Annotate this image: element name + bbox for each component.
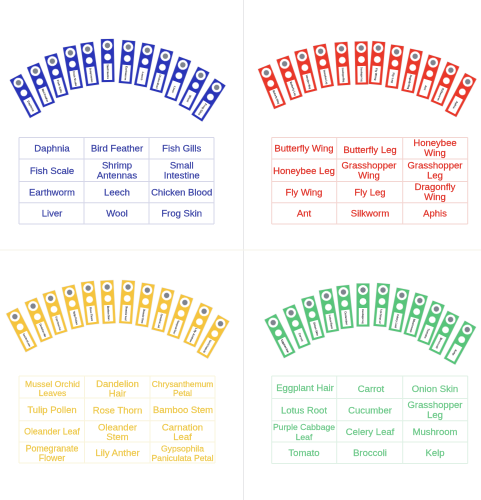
- slide: Fly Wing: [369, 41, 385, 85]
- table: blue slide names: Frog Skin: [161, 209, 202, 220]
- table: red slide names: Dragonfly: [415, 182, 456, 193]
- slide: Bird Feather: [27, 63, 55, 107]
- table: yellow slide names: Paniculata Petal: [151, 453, 214, 463]
- slide: Dandelion Hair: [25, 298, 53, 342]
- slide: Aphis: Aphis: [452, 100, 459, 110]
- slide: Butterfly Leg: Butterfly Leg: [289, 81, 297, 96]
- table: blue slide names: Chicken Blood: [151, 188, 212, 198]
- slide: Purple Cabbage Leaf: [373, 283, 390, 327]
- table: red slide names: Wing: [424, 148, 446, 159]
- table: blue slide names: Earthworm: [29, 188, 75, 198]
- table: red slide names: Fly Leg: [354, 188, 386, 198]
- table: blue slide names: Daphnia: [34, 144, 70, 154]
- table: yellow slide names: Lily Anther: [95, 448, 140, 459]
- slide: Oleander Leaf: [119, 280, 135, 324]
- slide: Grasshopper Leg: Grasshopper Leg: [360, 67, 364, 82]
- slide: Pomegranate Flower: [167, 294, 193, 339]
- table: red slide names: Butterfly Leg: [343, 145, 397, 156]
- slide: Wool: Wool: [185, 95, 192, 103]
- slide: Chicken Blood: [150, 48, 173, 93]
- table: yellow slide names: Petal: [173, 388, 192, 398]
- table: yellow slide names: Gypsophila: [161, 444, 204, 454]
- table: red slide names: Butterfly Wing: [274, 144, 334, 154]
- slide: Gypsophila Paniculata Petal: Gypsophila Paniculata Petal: [202, 339, 213, 354]
- table: yellow slide names: Leaf: [173, 432, 192, 443]
- table: green slide names: Cucumber: [348, 406, 392, 416]
- table: red slide names: Grasshopper: [342, 161, 396, 172]
- table: red slide names: Ant: [297, 209, 311, 220]
- table: green slide names: [272, 376, 468, 464]
- slide: Eggplant Hair: Eggplant Hair: [280, 339, 290, 354]
- slide: Dandelion Hair: Dandelion Hair: [38, 323, 48, 338]
- table: green slide names: Eggplant Hair: [276, 383, 334, 394]
- slide: Cucumber: [336, 285, 354, 329]
- slide: Grasshopper Leg: Grasshopper Leg: [361, 309, 365, 324]
- table: yellow slide names: Oleander Leaf: [24, 426, 80, 436]
- table: blue slide names: Liver: [42, 209, 62, 220]
- slide: Lily Anther: Lily Anther: [188, 327, 198, 344]
- table: red slide names: Leg: [427, 170, 443, 182]
- slide: Kelp: [444, 321, 476, 365]
- slide: Fly Leg: Fly Leg: [390, 72, 396, 83]
- slide: Fish Scale: Fish Scale: [72, 71, 78, 87]
- slide: Oleander Leaf: Oleander Leaf: [124, 306, 129, 321]
- table: yellow slide names: Leaves: [39, 388, 66, 398]
- table: red slide names: Honeybee: [413, 138, 457, 149]
- slide: Bird Feather: Bird Feather: [41, 88, 50, 103]
- slide: Daphnia: Daphnia: [26, 100, 35, 112]
- slide: Liver: Liver: [170, 85, 177, 94]
- slide: Honeybee Wing: Honeybee Wing: [305, 74, 312, 89]
- table: green slide names: Carrot: [358, 384, 385, 395]
- table: green slide names: Tomato: [288, 448, 320, 459]
- slide: Earthworm: Earthworm: [123, 66, 129, 81]
- slide: Grasshopper Leg: [357, 284, 369, 326]
- slide: Oleander Stem: Oleander Stem: [140, 309, 146, 324]
- slide: Kelp: Kelp: [451, 349, 458, 356]
- table: red slide names: Fly Wing: [286, 188, 322, 198]
- slide: Mussel Orchid Leaves: Mussel Orchid Leaves: [22, 333, 32, 347]
- slide: Shrimp Antennas: [80, 42, 99, 86]
- slide: Leech: [134, 43, 155, 87]
- slide: Chrysanthemum Petal: [43, 290, 67, 335]
- panel: yellow flower slides: [6, 280, 229, 359]
- table: blue slide names: Bird Feather: [91, 144, 143, 154]
- slide: Celery Leaf: [389, 288, 409, 332]
- slide: Carnation Leaf: [152, 288, 174, 332]
- slide: Fish Scale: [63, 45, 83, 90]
- slide: Tulip Pollen: Tulip Pollen: [72, 311, 79, 325]
- slide: Gypsophila Paniculata Petal: [197, 315, 229, 359]
- slide: Chrysanthemum Petal: Chrysanthemum Petal: [54, 316, 62, 331]
- slide: Celery Leaf: Celery Leaf: [394, 314, 400, 328]
- slide: Shrimp Antennas: Shrimp Antennas: [88, 68, 94, 83]
- table: red slide names: Honeybee Leg: [273, 166, 335, 177]
- table: blue slide names: Antennas: [97, 170, 137, 182]
- slide: Oleander Stem: [135, 283, 155, 327]
- table: red slide names: Grasshopper: [408, 161, 462, 172]
- table: green slide names: Broccoli: [353, 448, 387, 459]
- table: blue slide names: [19, 138, 214, 224]
- slide: Silkworm: [431, 62, 459, 106]
- slide: Pomegranate Flower: Pomegranate Flower: [172, 320, 181, 335]
- slide: Tomato: [417, 301, 445, 345]
- table: green slide names: Lotus Root: [281, 406, 327, 416]
- table: red slide names: Silkworm: [351, 209, 389, 220]
- slide: Purple Cabbage Leaf: Purple Cabbage Leaf: [378, 309, 383, 324]
- slide: Broccoli: [429, 311, 459, 355]
- table: green slide names: Leg: [427, 410, 443, 421]
- slide: Butterfly Leg: [276, 56, 303, 100]
- table: blue slide names: Fish Gills: [162, 144, 201, 154]
- table: red slide names: Aphis: [423, 209, 447, 220]
- table: yellow slide names: Hair: [109, 388, 126, 400]
- slide: Liver: [164, 57, 191, 101]
- table: yellow slide names: Rose Thorn: [93, 406, 142, 416]
- panel: red insect slides: [258, 41, 476, 117]
- slide: Frog Skin: [191, 78, 226, 122]
- slide: Broccoli: Broccoli: [435, 337, 444, 349]
- slide: Grasshopper Leg: [355, 41, 368, 85]
- slide: Ant: Ant: [423, 85, 428, 91]
- slide: Fish Gills: [44, 53, 69, 98]
- table: blue slide names: Small: [170, 161, 194, 172]
- slide: Daphnia: [10, 74, 41, 118]
- slide: Fly Leg: [385, 45, 404, 89]
- slide: Wool: [179, 67, 209, 111]
- table: yellow slide names: Flower: [39, 453, 65, 463]
- table: green slide names: Purple Cabbage: [273, 422, 335, 432]
- slide: Onion Skin: Onion Skin: [312, 322, 320, 336]
- table: green slide names: Celery Leaf: [346, 427, 395, 438]
- slide: Grasshopper Wing: [335, 42, 350, 86]
- slide: Lily Anther: [183, 303, 213, 347]
- slide: Earthworm: [119, 40, 135, 84]
- table: blue slide names: Shrimp: [102, 161, 132, 172]
- slide: Bamboo Stem: Bamboo Stem: [106, 306, 111, 321]
- table: blue slide names: Intestine: [164, 170, 200, 182]
- table: red slide names: Wing: [424, 192, 446, 203]
- slide: Lotus Root: [319, 288, 339, 333]
- slide: Frog Skin: Frog Skin: [197, 102, 208, 116]
- slide: Chicken Blood: Chicken Blood: [155, 74, 162, 89]
- table: green slide names: Onion Skin: [412, 384, 458, 395]
- table: green slide names: Leaf: [296, 432, 313, 442]
- table: yellow slide names: Tulip Pollen: [27, 405, 77, 416]
- table: yellow slide names: Carnation: [162, 422, 203, 434]
- table: green slide names: Grasshopper: [408, 400, 462, 411]
- slide: Small Intestine: Small Intestine: [106, 64, 110, 79]
- slide: Eggplant Hair: [265, 314, 295, 358]
- slide: Mussel Orchid Leaves: [6, 308, 37, 352]
- slide: Cucumber: Cucumber: [343, 311, 349, 326]
- table: green slide names: Mushroom: [413, 427, 458, 438]
- table: yellow slide names: Chrysanthemum: [152, 379, 213, 389]
- slide: Fly Wing: Fly Wing: [373, 68, 379, 81]
- table: blue slide names: Leech: [104, 188, 130, 198]
- slide: Honeybee Leg: [313, 44, 334, 88]
- slide: Aphis: [445, 73, 476, 117]
- table: blue slide names: Wool: [106, 209, 128, 220]
- slide: Butterfly Wing: [258, 64, 286, 109]
- slide: Grasshopper Wing: Grasshopper Wing: [341, 68, 346, 82]
- table: yellow slide names: Stem: [106, 432, 129, 443]
- slide: Ant: [416, 55, 441, 99]
- slide: Carrot: Carrot: [297, 332, 304, 342]
- slide: Leech: Leech: [140, 71, 145, 81]
- slide: Dragonfly Wing: [401, 49, 423, 93]
- table: red slide names: [272, 138, 468, 224]
- table: yellow slide names: Bamboo Stem: [153, 405, 213, 416]
- panel: blue animal slides: [10, 39, 226, 122]
- slide: Lotus Root: Lotus Root: [328, 314, 334, 329]
- slide: Mushroom: [404, 293, 428, 337]
- slide: Honeybee Leg: Honeybee Leg: [322, 69, 329, 85]
- slide: Rose Thorn: Rose Thorn: [89, 307, 94, 321]
- table: green slide names: Kelp: [425, 448, 445, 459]
- slide: Butterfly Wing: Butterfly Wing: [272, 90, 281, 105]
- table: yellow slide names: Pomegranate: [26, 444, 79, 454]
- slide: Tulip Pollen: [62, 285, 84, 329]
- slide: Silkworm: Silkworm: [436, 87, 445, 102]
- table: yellow slide names: Oleander: [98, 422, 137, 434]
- slide: Bamboo Stem: [100, 280, 116, 324]
- slide: Carrot: [283, 304, 311, 349]
- table: yellow slide names: Mussel Orchid: [25, 379, 80, 389]
- slide: Carnation Leaf: Carnation Leaf: [157, 313, 164, 328]
- table: yellow slide names: [19, 376, 215, 463]
- panel: green vegetable slides: [265, 283, 476, 365]
- slide: Rose Thorn: [81, 281, 99, 325]
- slide: Onion Skin: [301, 296, 325, 340]
- table: yellow slide names: Dandelion: [96, 379, 139, 390]
- slide: Tomato: Tomato: [423, 328, 431, 339]
- slide: Dragonfly Wing: Dragonfly Wing: [406, 74, 413, 90]
- slide: Honeybee Wing: [294, 49, 317, 93]
- slide: Small Intestine: [101, 39, 114, 82]
- table: red slide names: Wing: [358, 170, 380, 182]
- slide: Fish Gills: Fish Gills: [56, 79, 63, 94]
- table: blue slide names: Fish Scale: [30, 166, 74, 177]
- slide: Mushroom: Mushroom: [409, 318, 416, 333]
